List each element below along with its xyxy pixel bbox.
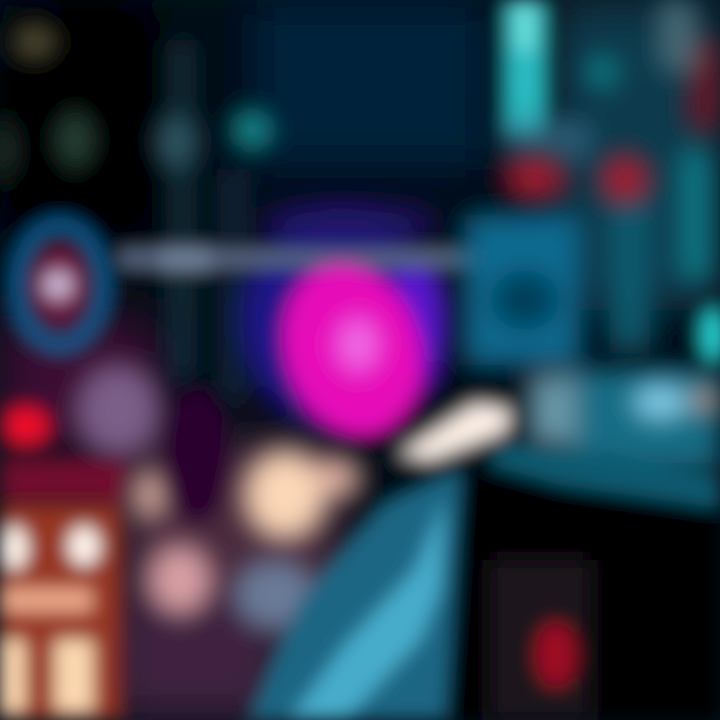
magenta orb bbox=[260, 245, 444, 455]
red signs bbox=[505, 156, 649, 204]
top cyan light beam bbox=[505, 0, 545, 135]
teal accents at top bbox=[160, 40, 617, 400]
blue glass structure bbox=[465, 215, 720, 470]
dark figure bbox=[165, 387, 229, 523]
cyan right glow bbox=[700, 307, 720, 363]
pink lights bbox=[134, 471, 212, 616]
peach glow bbox=[245, 451, 359, 539]
magenta halo bbox=[240, 204, 443, 428]
cyan slab bbox=[250, 470, 460, 720]
grey-blue haze bbox=[233, 559, 317, 631]
bottom-left warm lights bbox=[0, 505, 120, 720]
top-left dim lights bbox=[0, 28, 93, 180]
mauve glow bbox=[76, 364, 160, 456]
grey panel bottom bbox=[490, 560, 590, 720]
pale highlights at right bbox=[632, 384, 720, 420]
horizontal light band bbox=[120, 248, 480, 270]
red lower light bbox=[536, 623, 576, 687]
dark red band bbox=[0, 460, 125, 502]
teal ledge bbox=[490, 445, 720, 508]
circular ring sign bbox=[18, 225, 102, 345]
white diagonal highlight bbox=[395, 402, 512, 462]
red dot bbox=[2, 406, 50, 446]
dark lower right block bbox=[445, 472, 720, 720]
right building blocks bbox=[505, 0, 720, 350]
